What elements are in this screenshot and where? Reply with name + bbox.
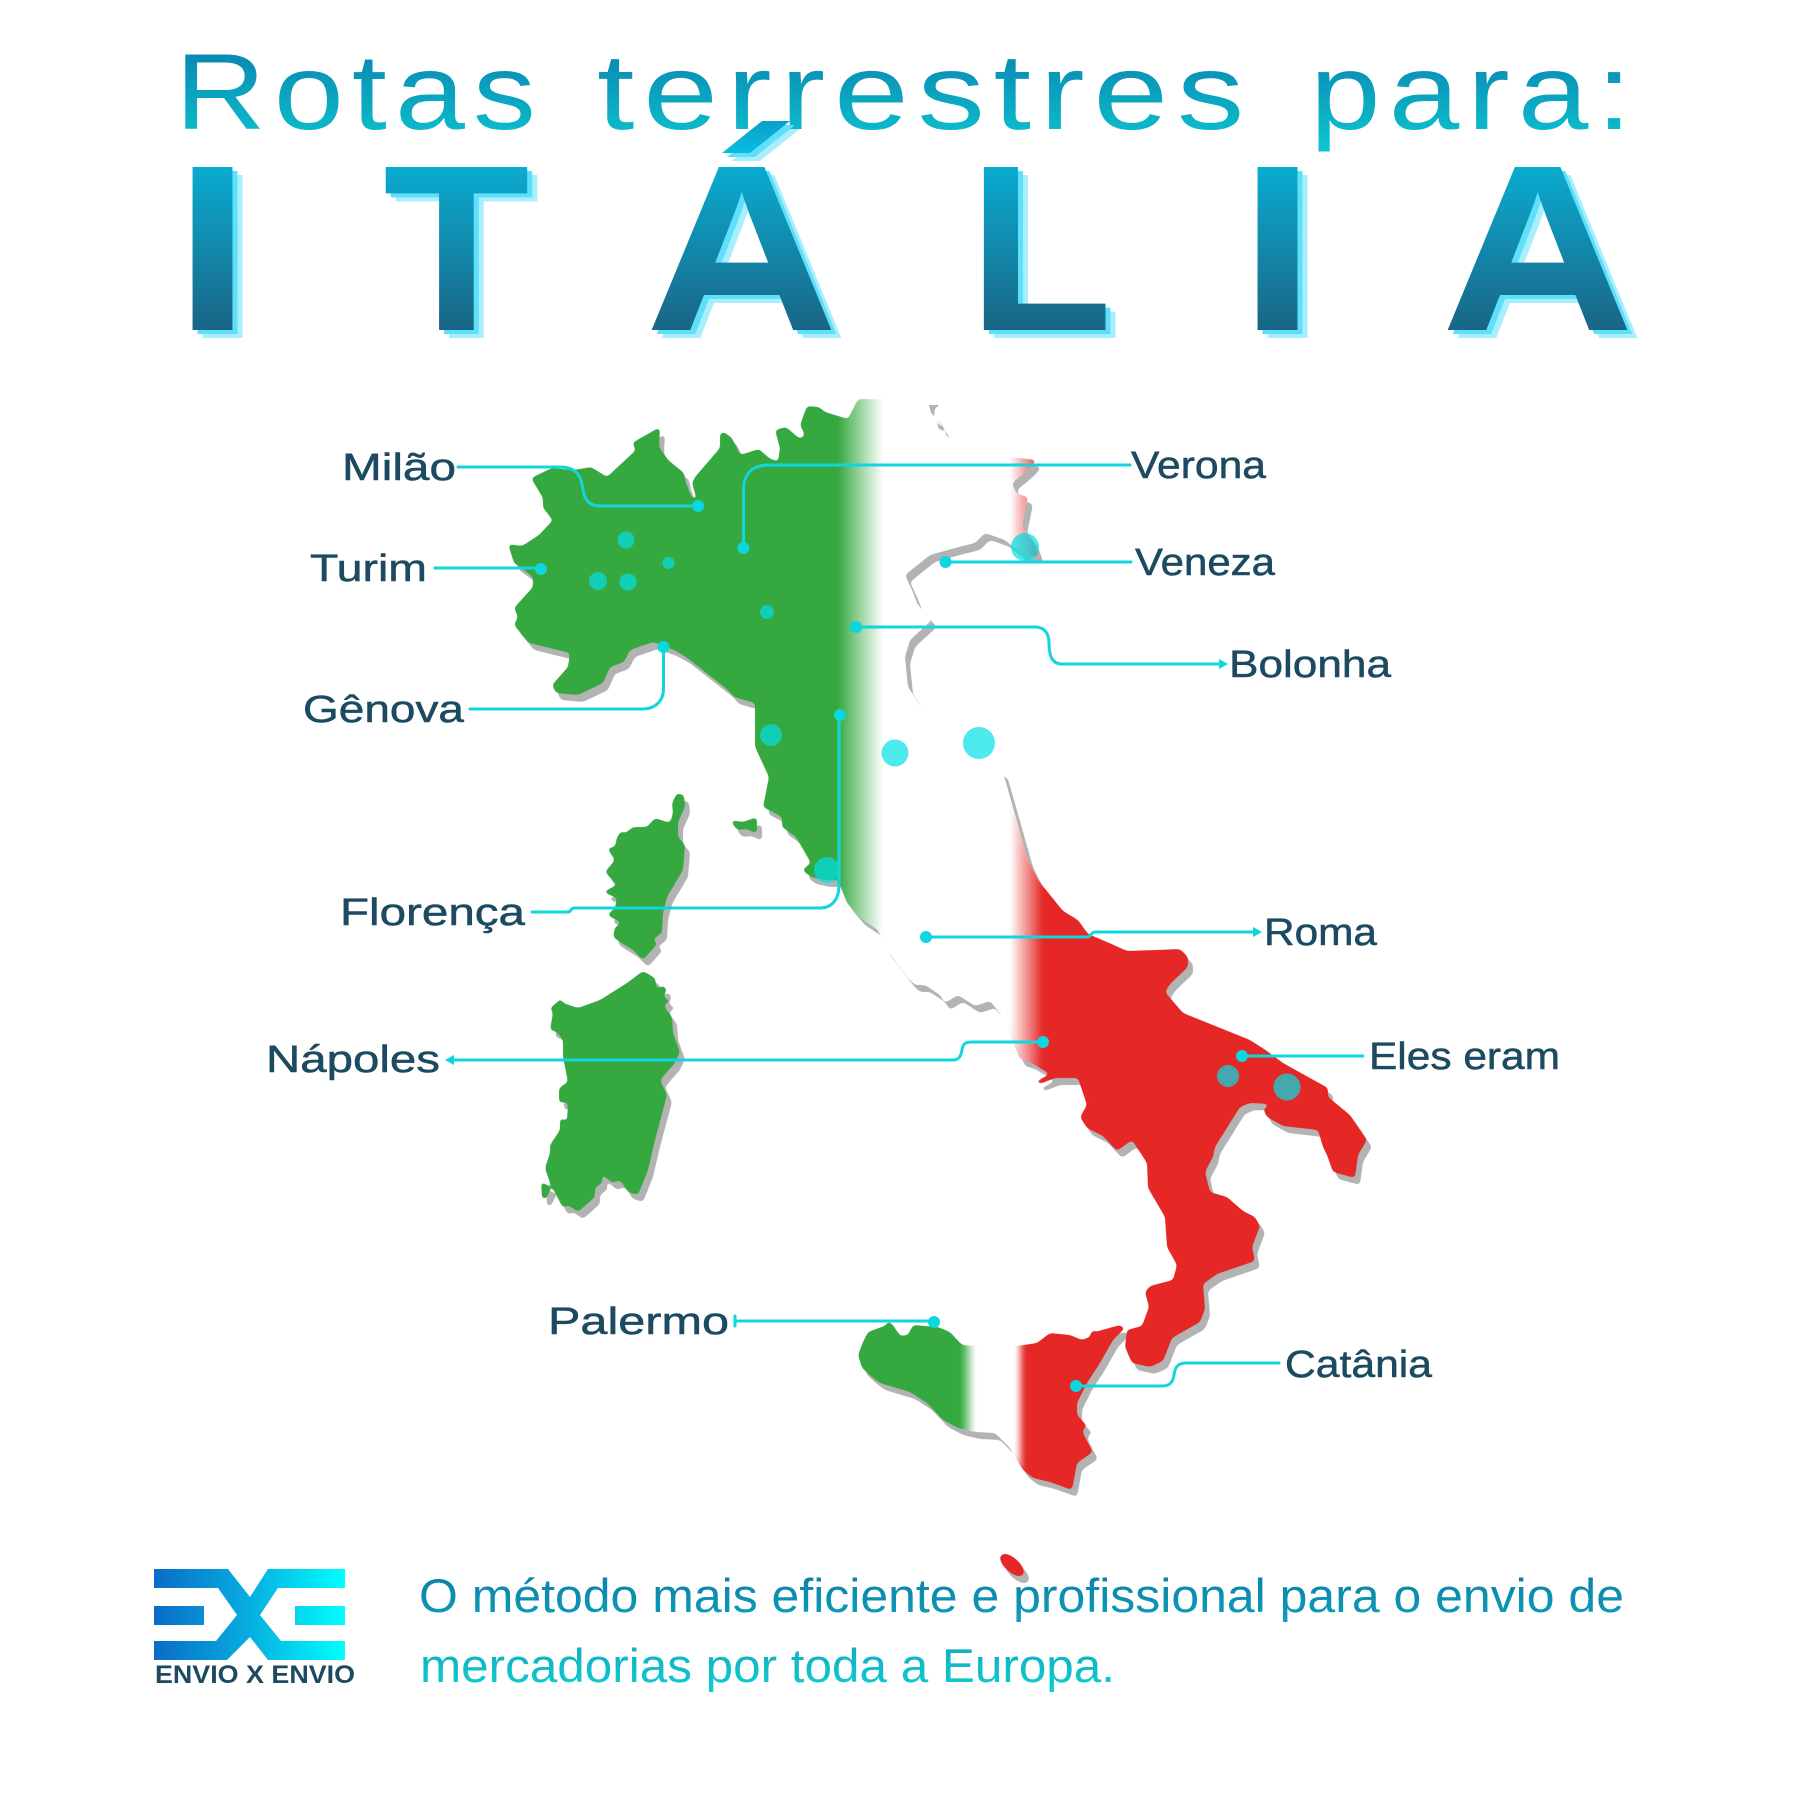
label: Veneza <box>940 542 1276 584</box>
label: Milão: Milão <box>342 447 456 489</box>
logo text: ENVIO X ENVIO <box>155 1661 355 1689</box>
label: Catânia <box>1070 1344 1433 1392</box>
label: Gênova <box>303 641 670 731</box>
label: Nápoles <box>266 1036 1049 1081</box>
map: small island <box>541 1181 551 1199</box>
heading: ITÁLIA: T <box>383 116 530 381</box>
label: Palermo: Palermo <box>548 1301 729 1343</box>
label: Bolonha: Bolonha <box>1229 644 1392 686</box>
title: Rotas terrestres para: Rotas <box>175 31 544 152</box>
title: Rotas terrestres para: terrestres <box>597 31 1253 152</box>
label: Catânia: Catânia <box>1285 1344 1433 1386</box>
map of Italy <box>508 399 1372 1587</box>
map: mainland <box>508 399 1367 1367</box>
label: Turim <box>310 548 547 590</box>
title: Rotas terrestres para <box>175 31 1640 152</box>
label: Eles eram <box>1236 1036 1560 1078</box>
label: Veneza: Veneza <box>1135 542 1276 584</box>
label: Nápoles: Nápoles <box>266 1039 440 1081</box>
logo mark <box>154 1569 345 1660</box>
label: Florença <box>340 709 846 934</box>
label: Verona: Verona <box>1131 445 1267 487</box>
tagline <box>419 1569 1624 1692</box>
heading: ITÁLIA: I <box>174 116 251 381</box>
heading: ITÁLIA: L <box>968 116 1113 381</box>
heading: ITÁLIA: Á <box>645 115 838 381</box>
label: Verona <box>738 445 1267 554</box>
label: Roma <box>920 912 1378 954</box>
title: Rotas terrestres para: para: <box>1310 31 1640 152</box>
heading: ITÁLIA <box>192 121 1638 338</box>
label: Palermo <box>548 1301 940 1343</box>
logo: Envio X Envio <box>154 1569 355 1689</box>
map: Sicily <box>858 1320 1125 1490</box>
map: regions in flag colours <box>508 399 1367 1580</box>
label: Bolonha <box>850 621 1392 686</box>
map: Elba <box>730 817 757 834</box>
label: Florença: Florença <box>340 892 526 934</box>
map: Sardinia <box>545 971 680 1212</box>
label: Eles eram: Eles eram <box>1369 1036 1560 1078</box>
label: Milão <box>342 447 704 512</box>
map: Malta <box>996 1550 1028 1580</box>
label: Turim: Turim <box>310 548 427 590</box>
heading: ITÁLIA: A <box>1441 115 1634 381</box>
tagline: mercadorias por toda a Europa. <box>420 1639 1115 1692</box>
tagline: O método mais eficiente e profissional para o envio de <box>419 1569 1624 1622</box>
label: Gênova: Gênova <box>303 689 465 731</box>
map: Alpine shadow fragments <box>929 405 950 438</box>
map: Corsica <box>603 793 685 960</box>
map: shadow <box>513 406 1372 1587</box>
heading: ITÁLIA: I <box>1239 116 1316 381</box>
label: Roma: Roma <box>1264 912 1378 954</box>
city markers <box>589 532 1300 1100</box>
